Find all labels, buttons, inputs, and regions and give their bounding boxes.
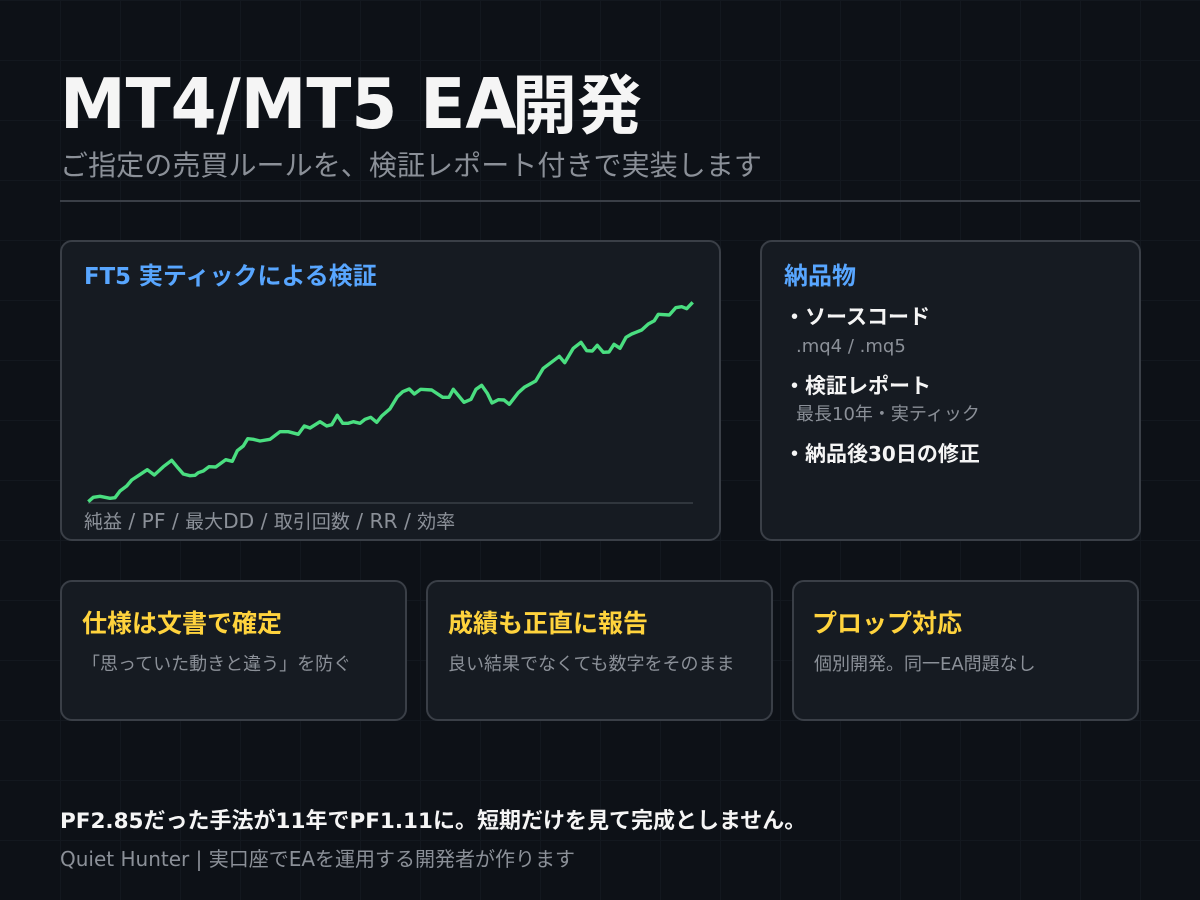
card: prop firm support: 個別開発。同一EA問題なし xyxy=(814,654,1036,675)
item: source code: ・ソースコード xyxy=(784,305,930,329)
card: prop firm support xyxy=(793,581,1138,720)
card: written spec: 仕様は文書で確定 xyxy=(82,609,282,638)
item: report: ・検証レポート xyxy=(784,374,931,398)
chart: equity curve xyxy=(88,302,693,504)
item: report xyxy=(784,374,980,425)
item: post-delivery fixes: ・納品後30日の修正 xyxy=(784,442,980,466)
card: honest reporting: 良い結果でなくても数字をそのまま xyxy=(448,654,735,675)
title: 開発 xyxy=(512,69,642,144)
footer credit: Quiet Hunter | 実口座でEAを運用する開発者が作ります xyxy=(60,847,575,871)
card: written spec xyxy=(61,581,406,720)
panel heading: verification: FT5 実ティックによる検証 xyxy=(84,262,377,290)
card: honest reporting: 成績も正直に報告 xyxy=(448,609,648,638)
card: honest reporting xyxy=(427,581,772,720)
item: source code xyxy=(784,305,930,357)
footer statement: PF2.85だった手法が11年でPF1.11に。短期だけを見て完成としません。 xyxy=(60,808,806,834)
card: written spec: 「思っていた動きと違う」を防ぐ xyxy=(82,654,351,675)
panel: deliverables xyxy=(761,241,1140,540)
card: prop firm support: プロップ対応 xyxy=(812,609,962,638)
chart caption: 純益 / PF / 最大DD / 取引回数 / RR / 効率 xyxy=(84,509,455,533)
item: source code: .mq4 / .mq5 xyxy=(796,336,906,357)
item: report: 最長10年・実ティック xyxy=(796,404,980,425)
subtitle: ご指定の売買ルールを、検証レポート付きで実装します xyxy=(60,149,762,182)
title: MT4/MT5 EA xyxy=(60,63,517,144)
panel: FT5 verification chart xyxy=(61,241,720,540)
panel heading: deliverables: 納品物 xyxy=(784,262,856,290)
